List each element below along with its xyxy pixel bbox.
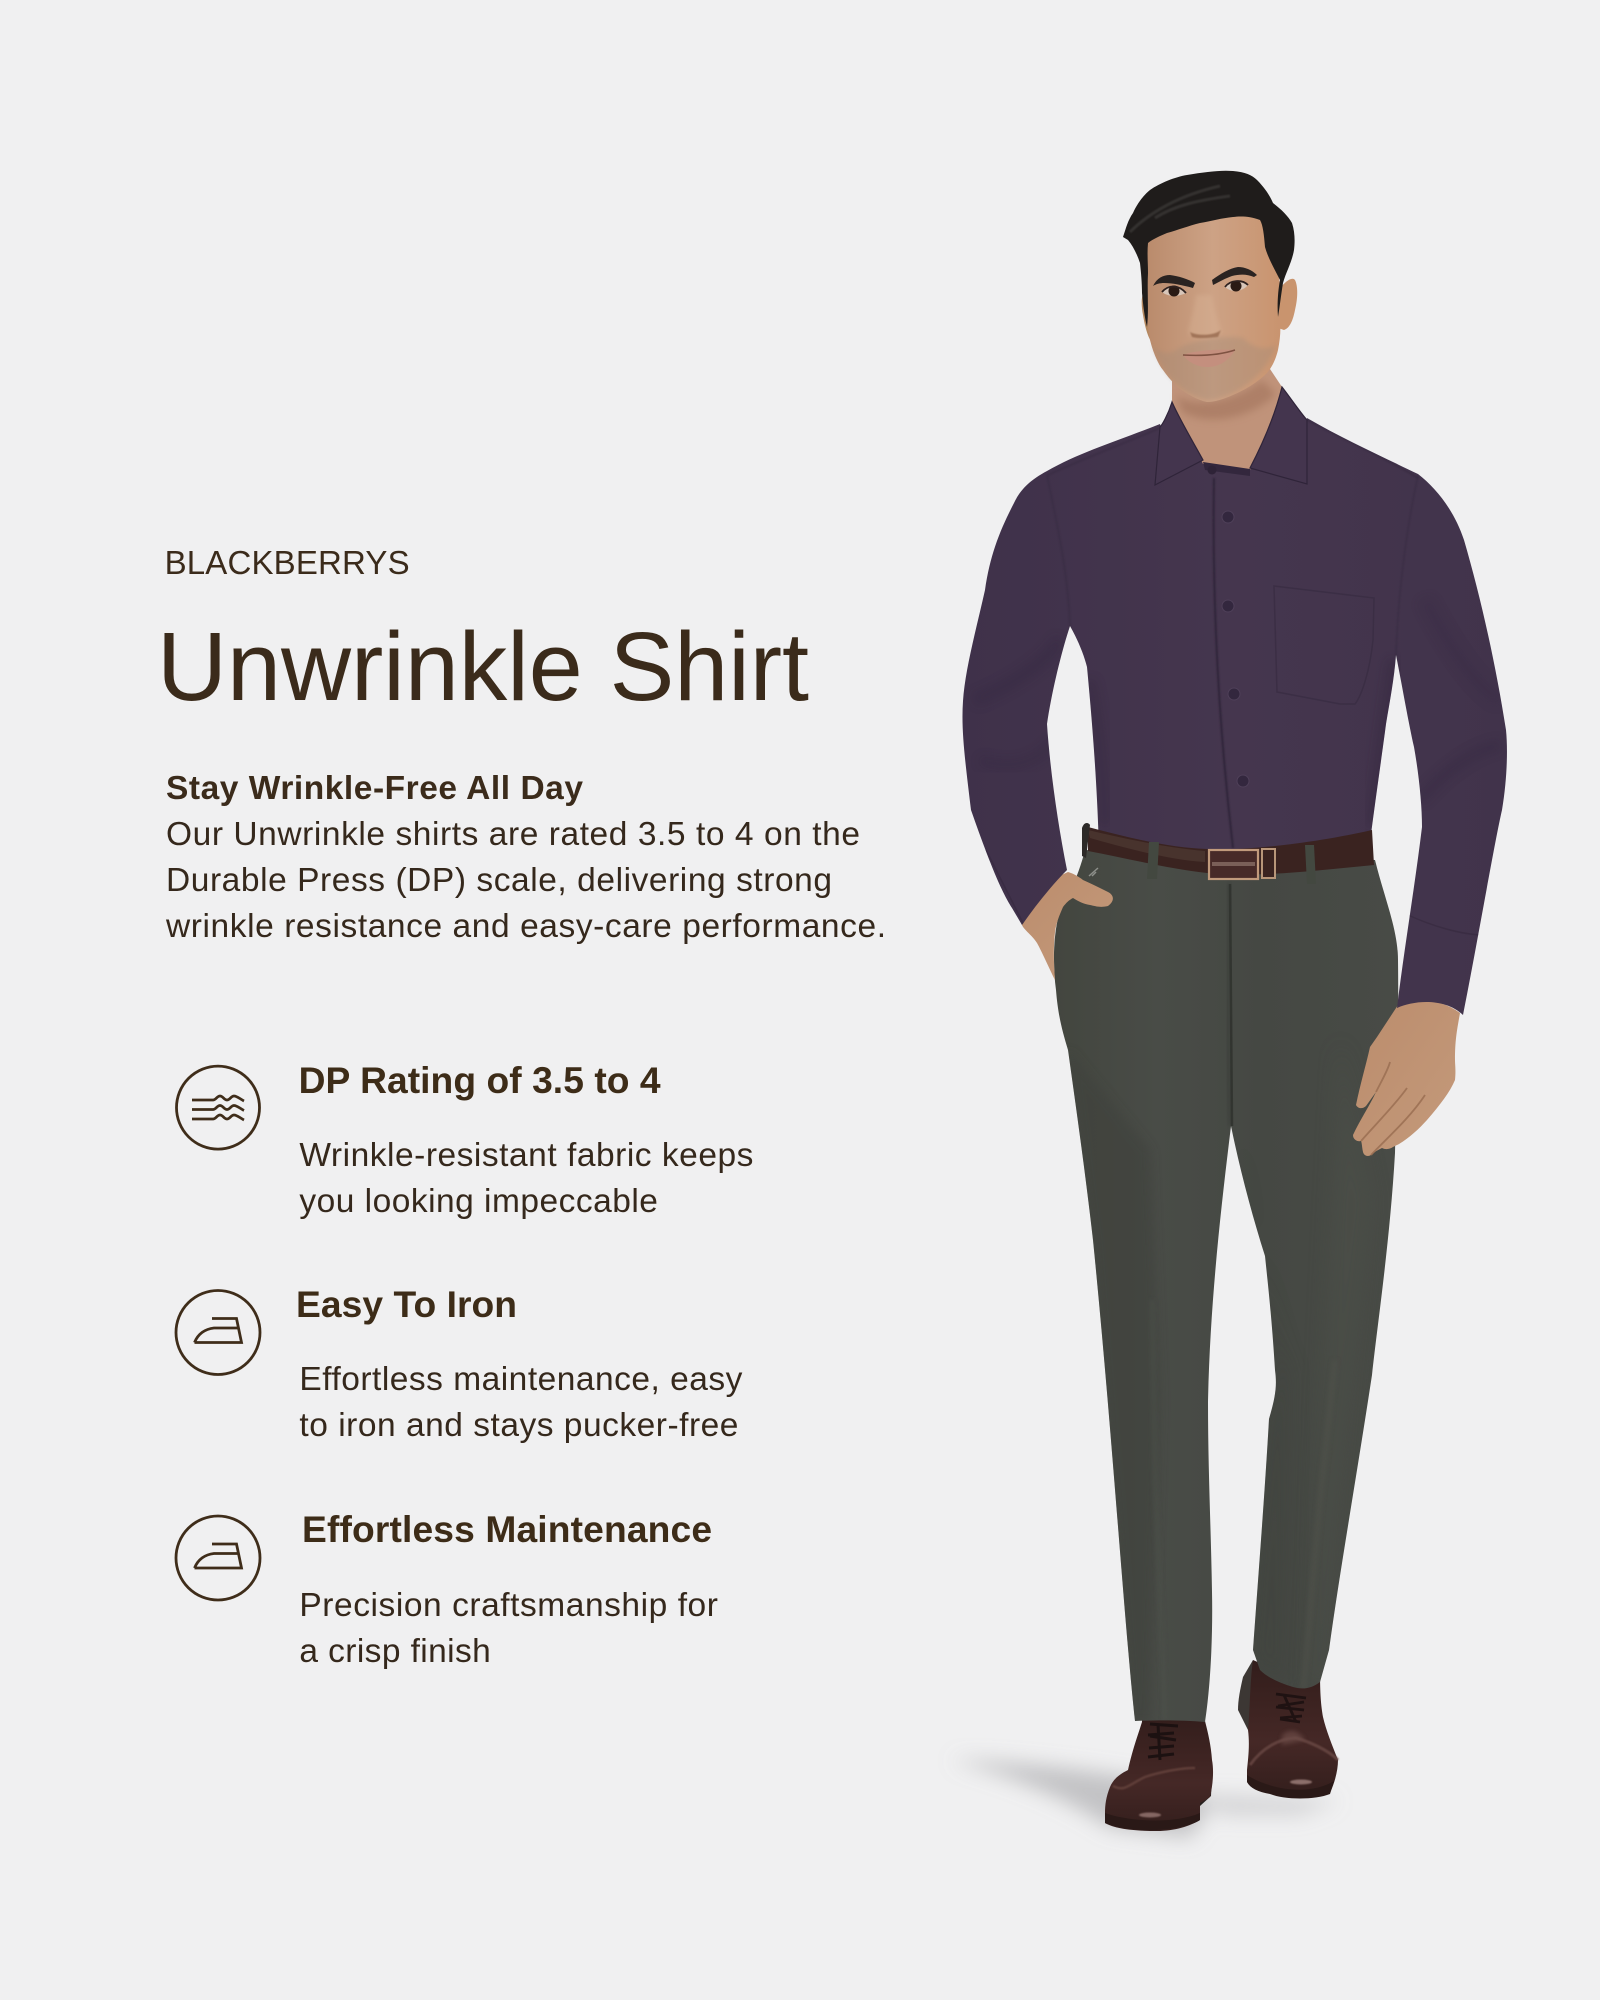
shirt folds and seams xyxy=(975,420,1500,935)
heading: DP Rating of 3.5 to 4 xyxy=(299,1059,661,1101)
belt loops xyxy=(1147,842,1159,879)
right hand xyxy=(1353,1000,1460,1156)
shoes xyxy=(1105,1660,1338,1831)
shirt xyxy=(962,418,1507,1015)
icon: fabric waves xyxy=(176,1066,260,1149)
heading: Easy To Iron xyxy=(296,1283,517,1325)
description xyxy=(299,1587,718,1670)
buttons xyxy=(1222,511,1249,787)
finger lines xyxy=(1361,1062,1425,1155)
placket xyxy=(1214,478,1233,848)
trouser shading and creases xyxy=(1068,884,1372,1722)
neck xyxy=(1172,366,1282,470)
nose shading xyxy=(1188,295,1222,338)
hair xyxy=(1123,171,1295,327)
palm and fingers xyxy=(1353,1000,1460,1156)
heading: Effortless Maintenance xyxy=(302,1508,712,1550)
intro body: Our Unwrinkle shirts are rated 3.5 to 4 on the xyxy=(166,816,860,853)
right ear xyxy=(1278,279,1297,330)
description: you looking impeccable xyxy=(299,1183,658,1220)
title: Unwrinkle Shirt xyxy=(157,612,809,721)
pocket xyxy=(1274,586,1374,704)
left shoe xyxy=(1105,1712,1213,1831)
model figure xyxy=(950,171,1507,1838)
intro body: wrinkle resistance and easy-care performance. xyxy=(165,908,886,945)
trousers xyxy=(1054,850,1398,1722)
feature: easy to iron xyxy=(176,1283,743,1444)
description: to iron and stays pucker-free xyxy=(299,1407,738,1444)
stubble xyxy=(1152,337,1276,400)
collar xyxy=(1155,387,1307,485)
floor shadow xyxy=(950,1760,1340,1838)
intro text block xyxy=(165,770,886,945)
face xyxy=(1145,201,1281,402)
description: Wrinkle-resistant fabric keeps xyxy=(299,1137,753,1174)
intro subheading: Stay Wrinkle-Free All Day xyxy=(166,770,583,807)
belt xyxy=(1082,823,1374,884)
icon: iron xyxy=(176,1290,260,1374)
description: Precision craftsmanship for xyxy=(299,1587,718,1624)
left hand in pocket xyxy=(1013,872,1113,980)
brand name: BLACKBERRYS xyxy=(165,544,410,581)
icon: iron xyxy=(176,1516,260,1600)
right shoe xyxy=(1238,1660,1338,1798)
feature: DP rating xyxy=(176,1059,753,1220)
buckle xyxy=(1209,849,1275,879)
description xyxy=(299,1361,743,1444)
intro body xyxy=(165,816,886,945)
description: Effortless maintenance, easy xyxy=(299,1361,743,1398)
mouth xyxy=(1183,350,1235,367)
intro body: Durable Press (DP) scale, delivering strong xyxy=(166,862,832,899)
hair highlights xyxy=(1130,186,1230,232)
head xyxy=(1123,171,1297,402)
left ear xyxy=(1142,292,1152,342)
trouser logo xyxy=(1089,868,1098,876)
description xyxy=(299,1137,753,1220)
feature: effortless maintenance xyxy=(176,1508,718,1670)
eyebrows xyxy=(1153,275,1195,288)
description: a crisp finish xyxy=(299,1633,491,1670)
eyes xyxy=(1162,287,1186,296)
